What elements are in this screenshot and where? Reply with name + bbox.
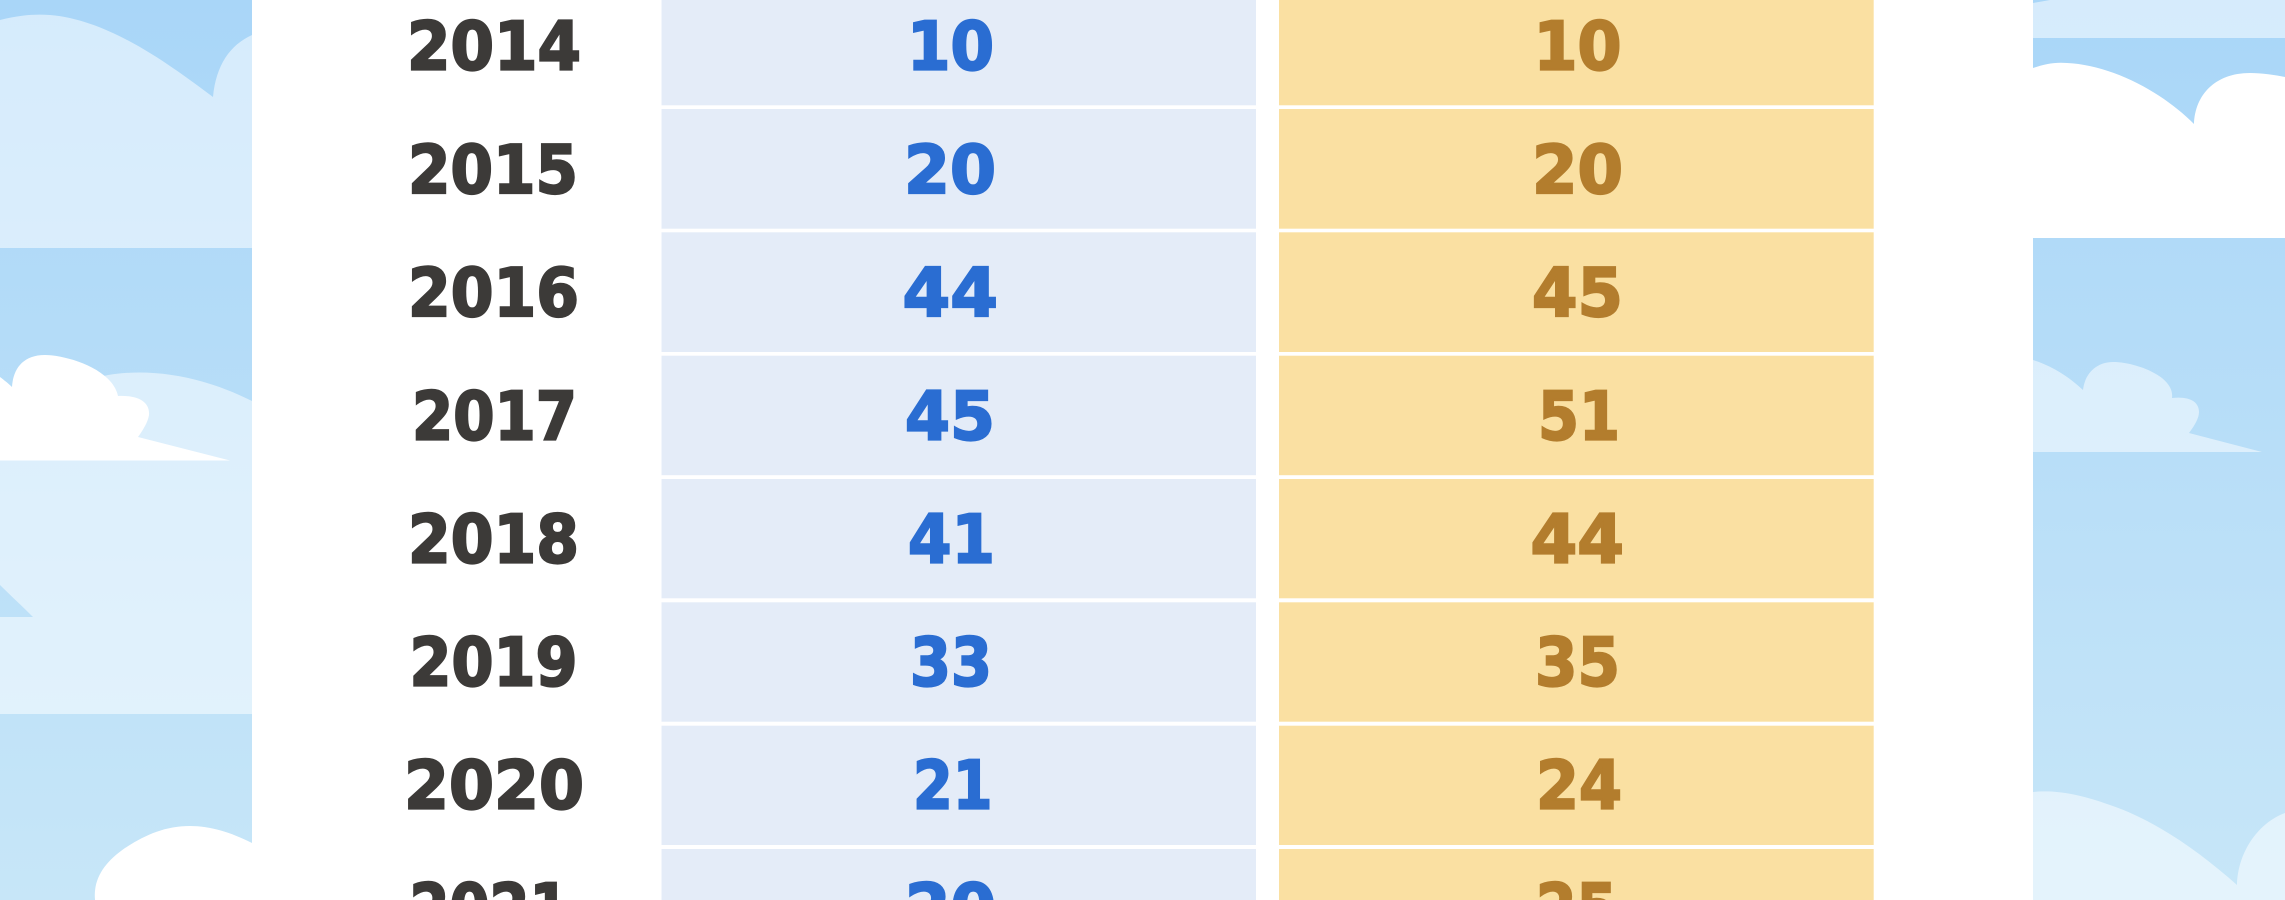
year labels: 2019 xyxy=(410,624,578,702)
cloud: bottom left white xyxy=(95,826,252,900)
year labels: 2016 xyxy=(408,254,579,332)
year labels: 2015 xyxy=(408,131,578,209)
year labels xyxy=(404,8,584,900)
orange column cells xyxy=(1279,0,1874,900)
orange column values: 51 xyxy=(1538,378,1620,456)
orange column values xyxy=(1530,8,1624,900)
white table panel xyxy=(252,0,2033,900)
year labels: 2017 xyxy=(412,378,577,456)
right clouds xyxy=(2033,0,2285,900)
blue column values: 45 xyxy=(905,378,995,456)
blue column cells xyxy=(662,0,1256,900)
orange column values: 35 xyxy=(1535,624,1620,702)
cloud: upper right white xyxy=(2033,63,2285,238)
blue column values: 20 xyxy=(904,131,996,209)
cloud: top right pale band xyxy=(2033,0,2285,38)
year labels: 2018 xyxy=(408,500,579,578)
cloud: upper left pale xyxy=(0,15,252,248)
orange column values: 20 xyxy=(1532,131,1623,209)
orange column values: 10 xyxy=(1534,8,1622,86)
blue column values: 44 xyxy=(902,254,998,332)
orange column values: 44 xyxy=(1530,500,1624,578)
year labels: 2014 xyxy=(407,8,581,86)
orange column values: 45 xyxy=(1532,254,1623,332)
orange column values: 24 xyxy=(1536,746,1622,824)
cloud: middle right pale xyxy=(2033,360,2262,452)
blue column values: 21 xyxy=(913,746,992,824)
cloud: middle left white xyxy=(0,355,230,460)
cloud: middle left pale xyxy=(0,372,252,714)
left clouds xyxy=(0,15,252,900)
cloud: bottom right pale xyxy=(2033,791,2285,900)
blue column values: 41 xyxy=(908,500,995,578)
blue column values xyxy=(902,8,998,900)
blue column values: 10 xyxy=(907,8,994,86)
blue column values: 33 xyxy=(910,624,992,702)
year labels: 2020 xyxy=(404,746,584,824)
